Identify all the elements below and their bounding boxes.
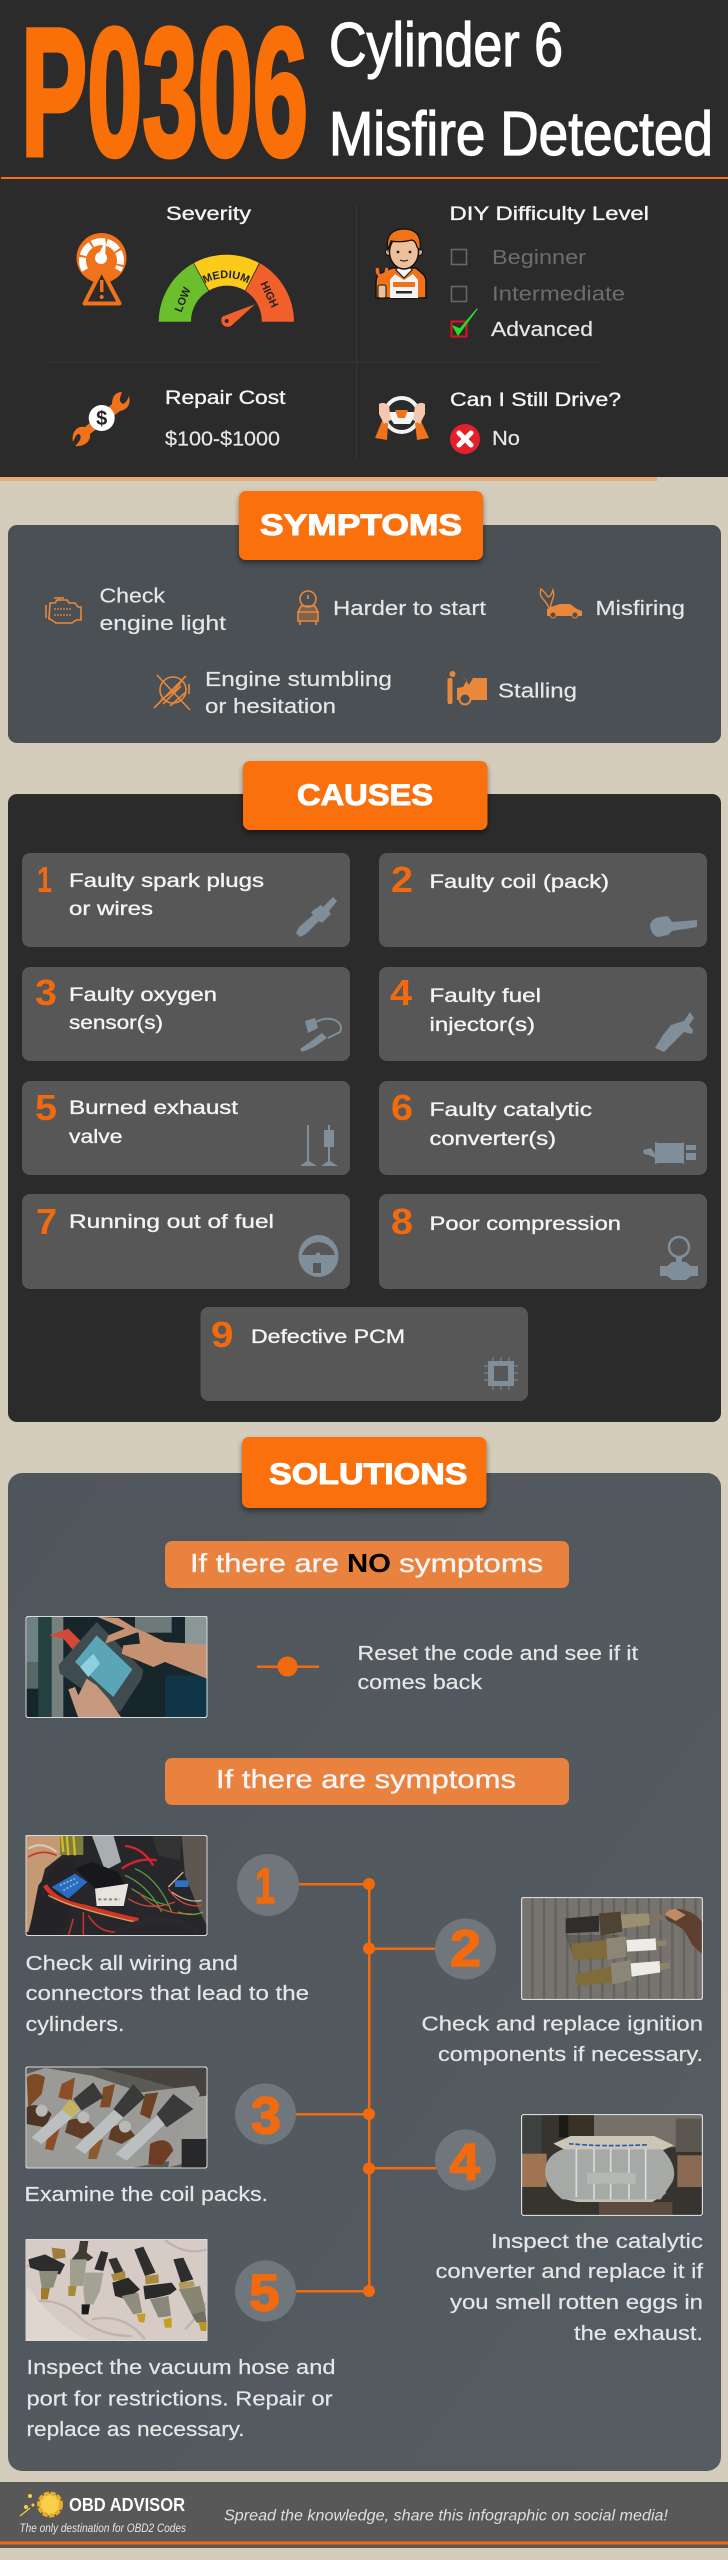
- text: harder to start: Harder to start: [333, 598, 487, 620]
- icon: severity gauge warning: [76, 233, 126, 304]
- text: step 3: Examine the coil packs.: [24, 2184, 268, 2206]
- text: reset code: Reset the code and see if it: [358, 1643, 639, 1665]
- heading: symptoms: [239, 491, 483, 560]
- card: cause 4: 4: [390, 972, 412, 1013]
- chart: severity gauge: LOW: [173, 285, 194, 314]
- card: cause 2: Faulty coil (pack): [430, 872, 609, 893]
- icon: stalling: [448, 671, 487, 704]
- icon: engine stumbling: [154, 675, 190, 710]
- card: cause 3: 3: [35, 972, 57, 1013]
- heading: solutions: SOLUTIONS: [269, 1458, 468, 1491]
- card: cause 2: [379, 853, 707, 947]
- heading: can i still drive: Can I Still Drive?: [450, 390, 621, 411]
- card: cause 3: [22, 967, 350, 1061]
- heading: repair cost: Repair Cost: [165, 388, 286, 409]
- text: step 4: Inspect the catalytic: [491, 2231, 703, 2253]
- text: step 4: the exhaust.: [574, 2323, 703, 2345]
- subheading: no symptoms: NO: [347, 1548, 391, 1578]
- text: step 2: Check and replace ignition: [422, 2014, 703, 2036]
- text: stalling: Stalling: [498, 680, 577, 702]
- number circle 5: [235, 2260, 296, 2322]
- step 1: [25, 1832, 309, 2036]
- timeline spine: [296, 1878, 436, 2297]
- step 4: [435, 2112, 706, 2345]
- text: reset code: comes back: [358, 1672, 483, 1694]
- number circle 3: [235, 2084, 296, 2146]
- text: engine stumbling: [205, 669, 392, 718]
- number circle 4: 4: [450, 2134, 480, 2192]
- number circle 1: [237, 1854, 299, 1916]
- heading: DIY difficulty: DIY Difficulty Level: [450, 204, 649, 225]
- card: cause 8: Poor compression: [430, 1214, 621, 1235]
- photo: coil packs: [26, 2066, 208, 2168]
- step 3: [24, 2064, 296, 2206]
- icon: misfiring car: [540, 589, 582, 618]
- checklist: difficulty: Beginner: [492, 247, 586, 269]
- card: cause 1: or wires: [69, 899, 153, 920]
- number circle 2: 2: [450, 1920, 481, 1978]
- icon: wrench with dollar: [73, 392, 130, 446]
- chart: severity gauge: MEDIUM: [202, 270, 250, 284]
- card: cause 6: 6: [391, 1087, 413, 1128]
- subheading: no symptoms: symptoms: [399, 1548, 543, 1578]
- subheading: no symptoms: [165, 1541, 569, 1588]
- text: step 4: [436, 2231, 704, 2345]
- icon: mechanic: [376, 229, 426, 298]
- icon: steering wheel: [375, 398, 429, 440]
- text: step 5: port for restrictions. Repair or: [26, 2388, 333, 2410]
- text: step 1: cylinders.: [26, 2014, 124, 2036]
- text: check engine light: [100, 586, 227, 635]
- text: step 4: converter and replace it if: [436, 2261, 704, 2283]
- heading: causes: CAUSES: [297, 779, 433, 812]
- text: engine stumbling: Engine stumbling: [205, 669, 392, 691]
- photo: catalytic converter: [521, 2114, 703, 2216]
- panel: header: [0, 0, 728, 481]
- heading: severity: Severity: [166, 204, 252, 225]
- text: step 2: components if necessary.: [438, 2044, 703, 2066]
- card: cause 1: Faulty spark plugs: [69, 871, 264, 892]
- value: repair cost: $100-$1000: [165, 428, 280, 450]
- subheading: no symptoms: If there are: [190, 1548, 339, 1578]
- text: step 1: Check all wiring and: [26, 1953, 238, 1975]
- connector: no symptoms: [257, 1656, 319, 1676]
- text: step 4: you smell rotten eggs in: [450, 2292, 703, 2314]
- card: cause 4: [379, 967, 707, 1061]
- photo: wiring: [26, 1835, 208, 1936]
- icon: red x: [450, 424, 480, 454]
- card: cause 3: sensor(s): [69, 1013, 163, 1034]
- checklist: difficulty: Advanced: [491, 319, 593, 341]
- card: cause 5: [22, 1081, 350, 1175]
- card: cause 1: [22, 853, 350, 947]
- card: cause 5: Burned exhaust: [69, 1098, 239, 1119]
- text: share message: Spread the knowledge, share this infographic on social media!: [224, 2508, 669, 2524]
- card: cause 9: 9: [211, 1314, 234, 1355]
- icon: wrench with dollar: $: [96, 408, 107, 430]
- chart: severity gauge: HIGH: [257, 280, 280, 310]
- panel: causes: [8, 761, 721, 1422]
- text: step 2: [422, 2014, 703, 2066]
- logo: OBD Advisor: [20, 2494, 186, 2535]
- header rule: [1, 177, 728, 179]
- card: cause 7: [22, 1194, 350, 1289]
- step 5: [25, 2236, 336, 2441]
- card: cause 1: 1: [37, 859, 52, 900]
- title: Cylinder 6: Cylinder 6: [329, 11, 563, 80]
- subheading: symptoms: If there are symptoms: [216, 1764, 516, 1794]
- card: cause 6: Faulty catalytic: [430, 1100, 592, 1121]
- heading: causes: [243, 761, 488, 830]
- number circle 2: [435, 1918, 496, 1980]
- subheading: symptoms: [165, 1758, 569, 1805]
- card: cause 7: 7: [36, 1201, 57, 1242]
- card: cause 9: Defective PCM: [251, 1327, 405, 1348]
- text: check engine light: engine light: [100, 613, 227, 635]
- panel: solutions: [8, 1437, 721, 2471]
- text: step 1: [26, 1953, 309, 2036]
- checklist: difficulty: [452, 247, 625, 341]
- panel: symptoms: [8, 491, 721, 743]
- text: step 5: [26, 2357, 336, 2441]
- card: cause 6: converter(s): [430, 1129, 556, 1150]
- icon: harder to start: [297, 591, 319, 625]
- heading: symptoms: SYMPTOMS: [260, 509, 462, 542]
- text: engine stumbling: or hesitation: [205, 696, 336, 718]
- step 2: [422, 1895, 706, 2066]
- logo: OBD Advisor: OBD ADVISOR: [69, 2495, 185, 2515]
- card: cause 5: valve: [69, 1127, 122, 1148]
- checklist: difficulty: Intermediate: [492, 284, 625, 306]
- number circle 3: 3: [251, 2088, 281, 2146]
- text: step 1: connectors that lead to the: [26, 1983, 309, 2005]
- card: cause 7: Running out of fuel: [69, 1212, 274, 1233]
- footer: [0, 2482, 728, 2548]
- card: cause 8: [379, 1194, 707, 1289]
- card: cause 4: injector(s): [430, 1015, 535, 1036]
- icon: check engine: [46, 598, 81, 623]
- heading: solutions: [242, 1437, 486, 1508]
- value: no: No: [492, 428, 520, 450]
- logo: OBD Advisor: The only destination for OBD2 Codes: [20, 2521, 186, 2535]
- card: cause 5: 5: [35, 1087, 57, 1128]
- photo: spark plugs: [521, 1897, 703, 2000]
- number circle 1: 1: [255, 1858, 275, 1914]
- card: cause 3: Faulty oxygen: [69, 985, 217, 1006]
- card: cause 6: [379, 1081, 707, 1175]
- photo: scan tool: [25, 1612, 212, 1722]
- text: step 5: Inspect the vacuum hose and: [26, 2357, 336, 2379]
- text: reset code: [358, 1643, 639, 1694]
- text: misfiring: Misfiring: [596, 598, 685, 620]
- chart: severity gauge: [158, 254, 294, 327]
- photo: injectors: [26, 2239, 208, 2341]
- text: step 5: replace as necessary.: [26, 2419, 244, 2441]
- card: cause 9: [200, 1307, 528, 1401]
- card: cause 2: 2: [391, 859, 413, 900]
- number circle 4: [435, 2130, 496, 2192]
- number circle 5: 5: [249, 2264, 280, 2322]
- card: cause 4: Faulty fuel: [430, 986, 541, 1007]
- text: check engine light: Check: [100, 586, 166, 608]
- card: cause 8: 8: [391, 1201, 413, 1242]
